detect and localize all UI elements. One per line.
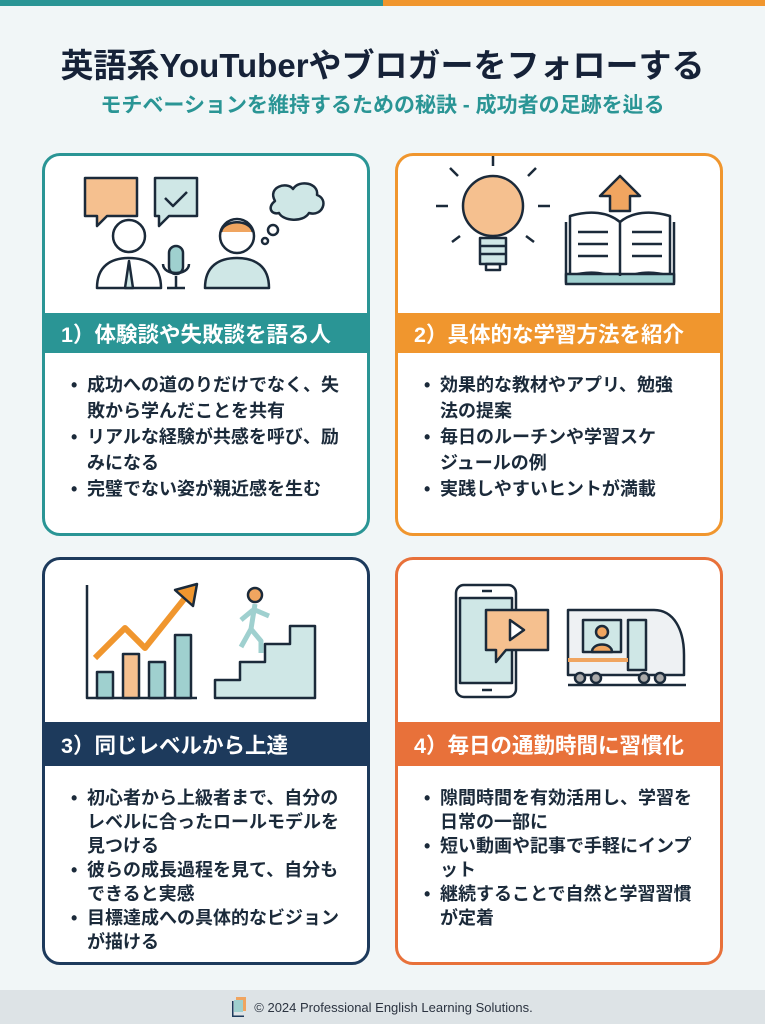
bullets 1: リアルな経験が共感を呼び、励みになる — [87, 427, 339, 473]
icon: phone and train — [454, 584, 686, 698]
subtitle: モチベーションを維持するための秘訣 - 成功者の足跡を辿る — [100, 94, 665, 117]
icon: chart and stairs — [86, 582, 316, 700]
bullets 1: 完璧でない姿が親近感を生む — [87, 479, 321, 499]
icon: logo — [232, 997, 246, 1017]
bullets 3: 彼らの成長過程を見て、自分もできると実感 — [87, 860, 338, 904]
header 4: 4）毎日の通勤時間に習慣化 — [414, 734, 684, 758]
footer — [0, 990, 765, 1024]
bullets 2 — [424, 375, 673, 499]
bullets 2: 法の提案 — [440, 401, 512, 421]
bullets 4: 継続することで自然と学習習慣が定着 — [440, 884, 691, 928]
bullets 1: 成功への道のりだけでなく、失敗から学んだことを共有 — [87, 375, 339, 421]
panel: 2 — [395, 153, 723, 536]
footer: © 2024 Professional English Learning Solutions. — [254, 1000, 533, 1014]
bullets 2: 効果的な教材やアプリ、勉強 — [440, 375, 673, 395]
bullets 2: 毎日のルーチンや学習スケ — [440, 427, 656, 447]
icon: bulb and book — [436, 156, 676, 286]
header 1 — [45, 313, 367, 353]
bullets 3: 目標達成への具体的なビジョンが描ける — [87, 908, 339, 952]
bullets 1 — [72, 375, 339, 499]
header 3: 3）同じレベルから上達 — [61, 734, 288, 758]
header 2: 2）具体的な学習方法を紹介 — [414, 322, 684, 346]
icon: speakers — [84, 176, 325, 290]
bullets 3 — [72, 788, 339, 952]
header 3 — [45, 722, 367, 766]
header 4 — [398, 722, 720, 766]
bullets 4: 隙間時間を有効活用し、学習を日常の一部に — [440, 788, 692, 832]
bullets 4: 短い動画や記事で手軽にインプット — [440, 836, 691, 880]
top color bar — [0, 0, 765, 6]
bullets 4 — [424, 788, 692, 928]
bullets 2: 実践しやすいヒントが満載 — [440, 479, 656, 499]
panel: 3 — [42, 557, 370, 965]
header 2 — [398, 313, 720, 353]
bullets 2: ジュールの例 — [440, 453, 547, 473]
bullets 3: 初心者から上級者まで、自分のレベルに合ったロールモデルを見つける — [87, 788, 339, 856]
panel: 4 — [395, 557, 723, 965]
panel: 1 — [42, 153, 370, 536]
title: 英語系YouTuberやブロガーをフォローする — [60, 47, 705, 84]
header 1: 1）体験談や失敗談を語る人 — [61, 322, 331, 346]
